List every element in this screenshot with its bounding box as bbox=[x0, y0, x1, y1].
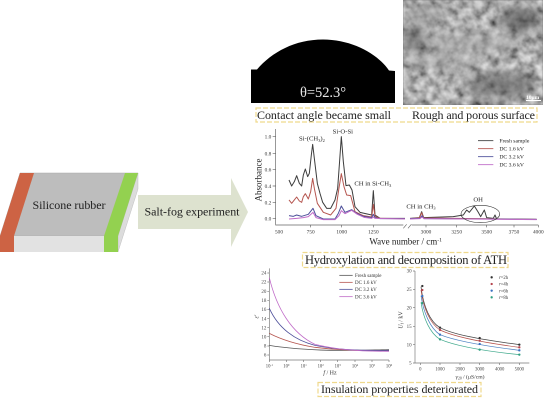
FTIR x tick labels: 500 bbox=[275, 229, 283, 235]
permittivity x tick labels: 3 bbox=[339, 363, 341, 367]
FTIR tick labels: 0.4 bbox=[265, 184, 272, 190]
permittivity axis titles: f / Hz bbox=[323, 369, 337, 376]
FTIR x tick labels: 1000 bbox=[336, 229, 347, 235]
permittivity x tick labels: 10 bbox=[369, 365, 374, 370]
permittivity x tick labels: 10 bbox=[283, 365, 288, 370]
permittivity legend: DC 1.6 kV bbox=[355, 281, 377, 286]
FTIR x tick labels: 3000 bbox=[421, 229, 432, 235]
voltage fitted curves bbox=[421, 287, 519, 355]
voltage y axis title: f bbox=[401, 322, 405, 324]
FTIR tick labels: 1.0 bbox=[265, 135, 272, 141]
voltage legend: r=4h bbox=[499, 283, 509, 288]
peak annotations: ) bbox=[320, 136, 323, 143]
permittivity y tick labels: 22 bbox=[261, 281, 267, 286]
permittivity x tick labels: 5 bbox=[374, 363, 376, 367]
FTIR x tick labels: 3750 bbox=[509, 229, 520, 235]
FTIR x tick labels bbox=[275, 229, 544, 235]
FTIR tick labels: 0.6 bbox=[265, 168, 272, 174]
voltage y tick labels: 5 bbox=[409, 362, 412, 367]
permittivity legend bbox=[339, 274, 382, 300]
permittivity y tick labels: 14 bbox=[261, 317, 267, 322]
FTIR x tick labels: 1250 bbox=[368, 229, 379, 235]
block label: Silicone rubber bbox=[32, 198, 106, 212]
permittivity x tick labels: -1 bbox=[270, 363, 273, 367]
SEM micrograph of rough porous surface bbox=[403, 0, 543, 105]
permittivity y tick labels: 8 bbox=[264, 345, 267, 350]
FTIR tick labels bbox=[265, 135, 272, 223]
FTIR x tick labels: 4000 bbox=[533, 229, 544, 235]
permittivity x tick labels: 4 bbox=[357, 363, 359, 367]
FTIR tick labels: 0.8 bbox=[265, 151, 272, 157]
FTIR axes bbox=[273, 129, 538, 228]
caption text: insulation: Insulation properties deteriorated bbox=[321, 382, 478, 396]
permittivity x tick labels: 10 bbox=[301, 365, 305, 370]
voltage y tick labels bbox=[407, 270, 412, 367]
peak annotations: OH bbox=[473, 196, 483, 203]
permittivity legend: Fresh sample bbox=[355, 274, 382, 279]
FTIR x tick labels: 3250 bbox=[451, 229, 462, 235]
permittivity x tick labels: 10 bbox=[318, 365, 322, 370]
caption text: hydroxylation: Hydroxylation and decomposition of ATH bbox=[305, 253, 507, 267]
FTIR spectrum curves bbox=[289, 137, 537, 220]
caption: contact angle: Contact angle became small bbox=[257, 108, 392, 122]
voltage y axis title: U bbox=[399, 324, 405, 329]
voltage x tick labels bbox=[419, 367, 525, 372]
FTIR legend: DC 3.6 kV bbox=[499, 162, 525, 168]
permittivity x tick labels: 10 bbox=[335, 365, 339, 370]
voltage legend: r=6h bbox=[499, 289, 509, 294]
peak annotations: 2 bbox=[323, 138, 325, 143]
permittivity y tick labels: 20 bbox=[261, 290, 267, 295]
permittivity vs frequency chart bbox=[255, 268, 393, 376]
FTIR x tick labels: 3500 bbox=[481, 229, 492, 235]
voltage data markers bbox=[421, 285, 520, 356]
dashed caption: surface findings bbox=[256, 108, 537, 122]
permittivity legend: DC 3.6 kV bbox=[355, 295, 377, 300]
FTIR legend bbox=[478, 138, 530, 168]
permittivity y tick labels: 16 bbox=[261, 308, 267, 313]
peak annotations bbox=[299, 129, 483, 211]
voltage y tick labels: 30 bbox=[407, 270, 412, 275]
FTIR x tick labels: 750 bbox=[307, 229, 315, 235]
voltage y tick labels: 15 bbox=[407, 325, 412, 330]
arrow label: Salt-fog experiment bbox=[144, 204, 240, 218]
permittivity x tick labels bbox=[266, 363, 393, 370]
silicone rubber sample block bbox=[0, 173, 138, 252]
FTIR legend: Fresh sample bbox=[499, 138, 530, 144]
peak annotations: Si-O-Si bbox=[333, 129, 353, 136]
FTIR absorbance spectrum chart bbox=[254, 129, 544, 247]
scale bar label: 10μm bbox=[526, 95, 540, 101]
peak annotations: 3 bbox=[389, 183, 391, 188]
voltage x tick labels: 2000 bbox=[455, 367, 465, 372]
FTIR legend: DC 1.6 kV bbox=[499, 146, 525, 152]
dashed caption: hydroxylation bbox=[302, 252, 508, 268]
permittivity x tick labels: 6 bbox=[391, 363, 393, 367]
voltage x tick labels: 4000 bbox=[495, 367, 505, 372]
permittivity curves bbox=[269, 278, 389, 351]
voltage x axis title: γ bbox=[456, 374, 458, 380]
permittivity axes bbox=[267, 268, 389, 362]
voltage y axis title: / kV bbox=[399, 311, 405, 323]
contact angle droplet image bbox=[251, 40, 395, 103]
peak annotations: CH in Si-CH bbox=[354, 181, 389, 188]
voltage x tick labels: 1000 bbox=[435, 367, 445, 372]
voltage y tick labels: 25 bbox=[407, 288, 412, 293]
peak annotations: Si-(CH bbox=[299, 136, 318, 143]
FTIR legend: DC 3.2 kV bbox=[499, 154, 525, 160]
caption: rough surface: Rough and porous surface bbox=[412, 108, 535, 122]
permittivity x tick labels: 10 bbox=[266, 365, 270, 370]
permittivity x tick labels: 2 bbox=[322, 363, 324, 367]
voltage y tick labels: 10 bbox=[407, 343, 412, 348]
permittivity x tick labels: 10 bbox=[386, 365, 391, 370]
peak annotations: 3 bbox=[433, 206, 436, 211]
permittivity y axis title: ε′ bbox=[255, 314, 261, 319]
contact angle value: θ=52.3° bbox=[300, 85, 346, 101]
FTIR x axis title: -1 bbox=[437, 238, 442, 244]
FTIR tick labels: 0.0 bbox=[265, 217, 272, 223]
permittivity x tick labels: 1 bbox=[305, 363, 307, 367]
voltage legend: r=8h bbox=[499, 296, 509, 301]
permittivity y tick labels: 24 bbox=[261, 272, 267, 277]
peak annotations: 3 bbox=[318, 138, 320, 143]
permittivity legend: DC 3.2 kV bbox=[355, 288, 377, 293]
flashover voltage vs conductivity chart bbox=[399, 270, 529, 380]
dashed caption: insulation properties bbox=[318, 382, 481, 396]
peak annotations: CH in CH bbox=[406, 203, 433, 210]
permittivity y tick labels: 6 bbox=[264, 354, 267, 359]
permittivity x tick labels: 10 bbox=[352, 365, 357, 370]
voltage axes bbox=[413, 271, 529, 365]
permittivity y tick labels: 18 bbox=[261, 299, 267, 304]
voltage x tick labels: 3000 bbox=[475, 367, 485, 372]
voltage x tick labels: 0 bbox=[419, 367, 422, 372]
FTIR x axis title: Wave number / cm bbox=[369, 237, 437, 247]
permittivity y tick labels: 12 bbox=[261, 326, 267, 331]
permittivity x tick labels: 0 bbox=[288, 363, 290, 367]
arrow: salt-fog experiment bbox=[138, 178, 248, 247]
voltage x axis title: / (μS/cm) bbox=[462, 373, 485, 380]
permittivity y tick labels: 10 bbox=[261, 335, 267, 340]
OH ellipse annotation bbox=[461, 205, 500, 223]
voltage x axis title: 20 bbox=[458, 376, 462, 380]
voltage legend: r=2h bbox=[499, 276, 509, 281]
voltage x tick labels: 5000 bbox=[515, 367, 525, 372]
voltage legend bbox=[490, 276, 509, 301]
FTIR axis titles: Absorbance bbox=[254, 159, 264, 201]
permittivity y tick labels bbox=[261, 272, 267, 359]
voltage y tick labels: 20 bbox=[407, 306, 412, 311]
FTIR tick labels: 0.2 bbox=[265, 200, 272, 206]
